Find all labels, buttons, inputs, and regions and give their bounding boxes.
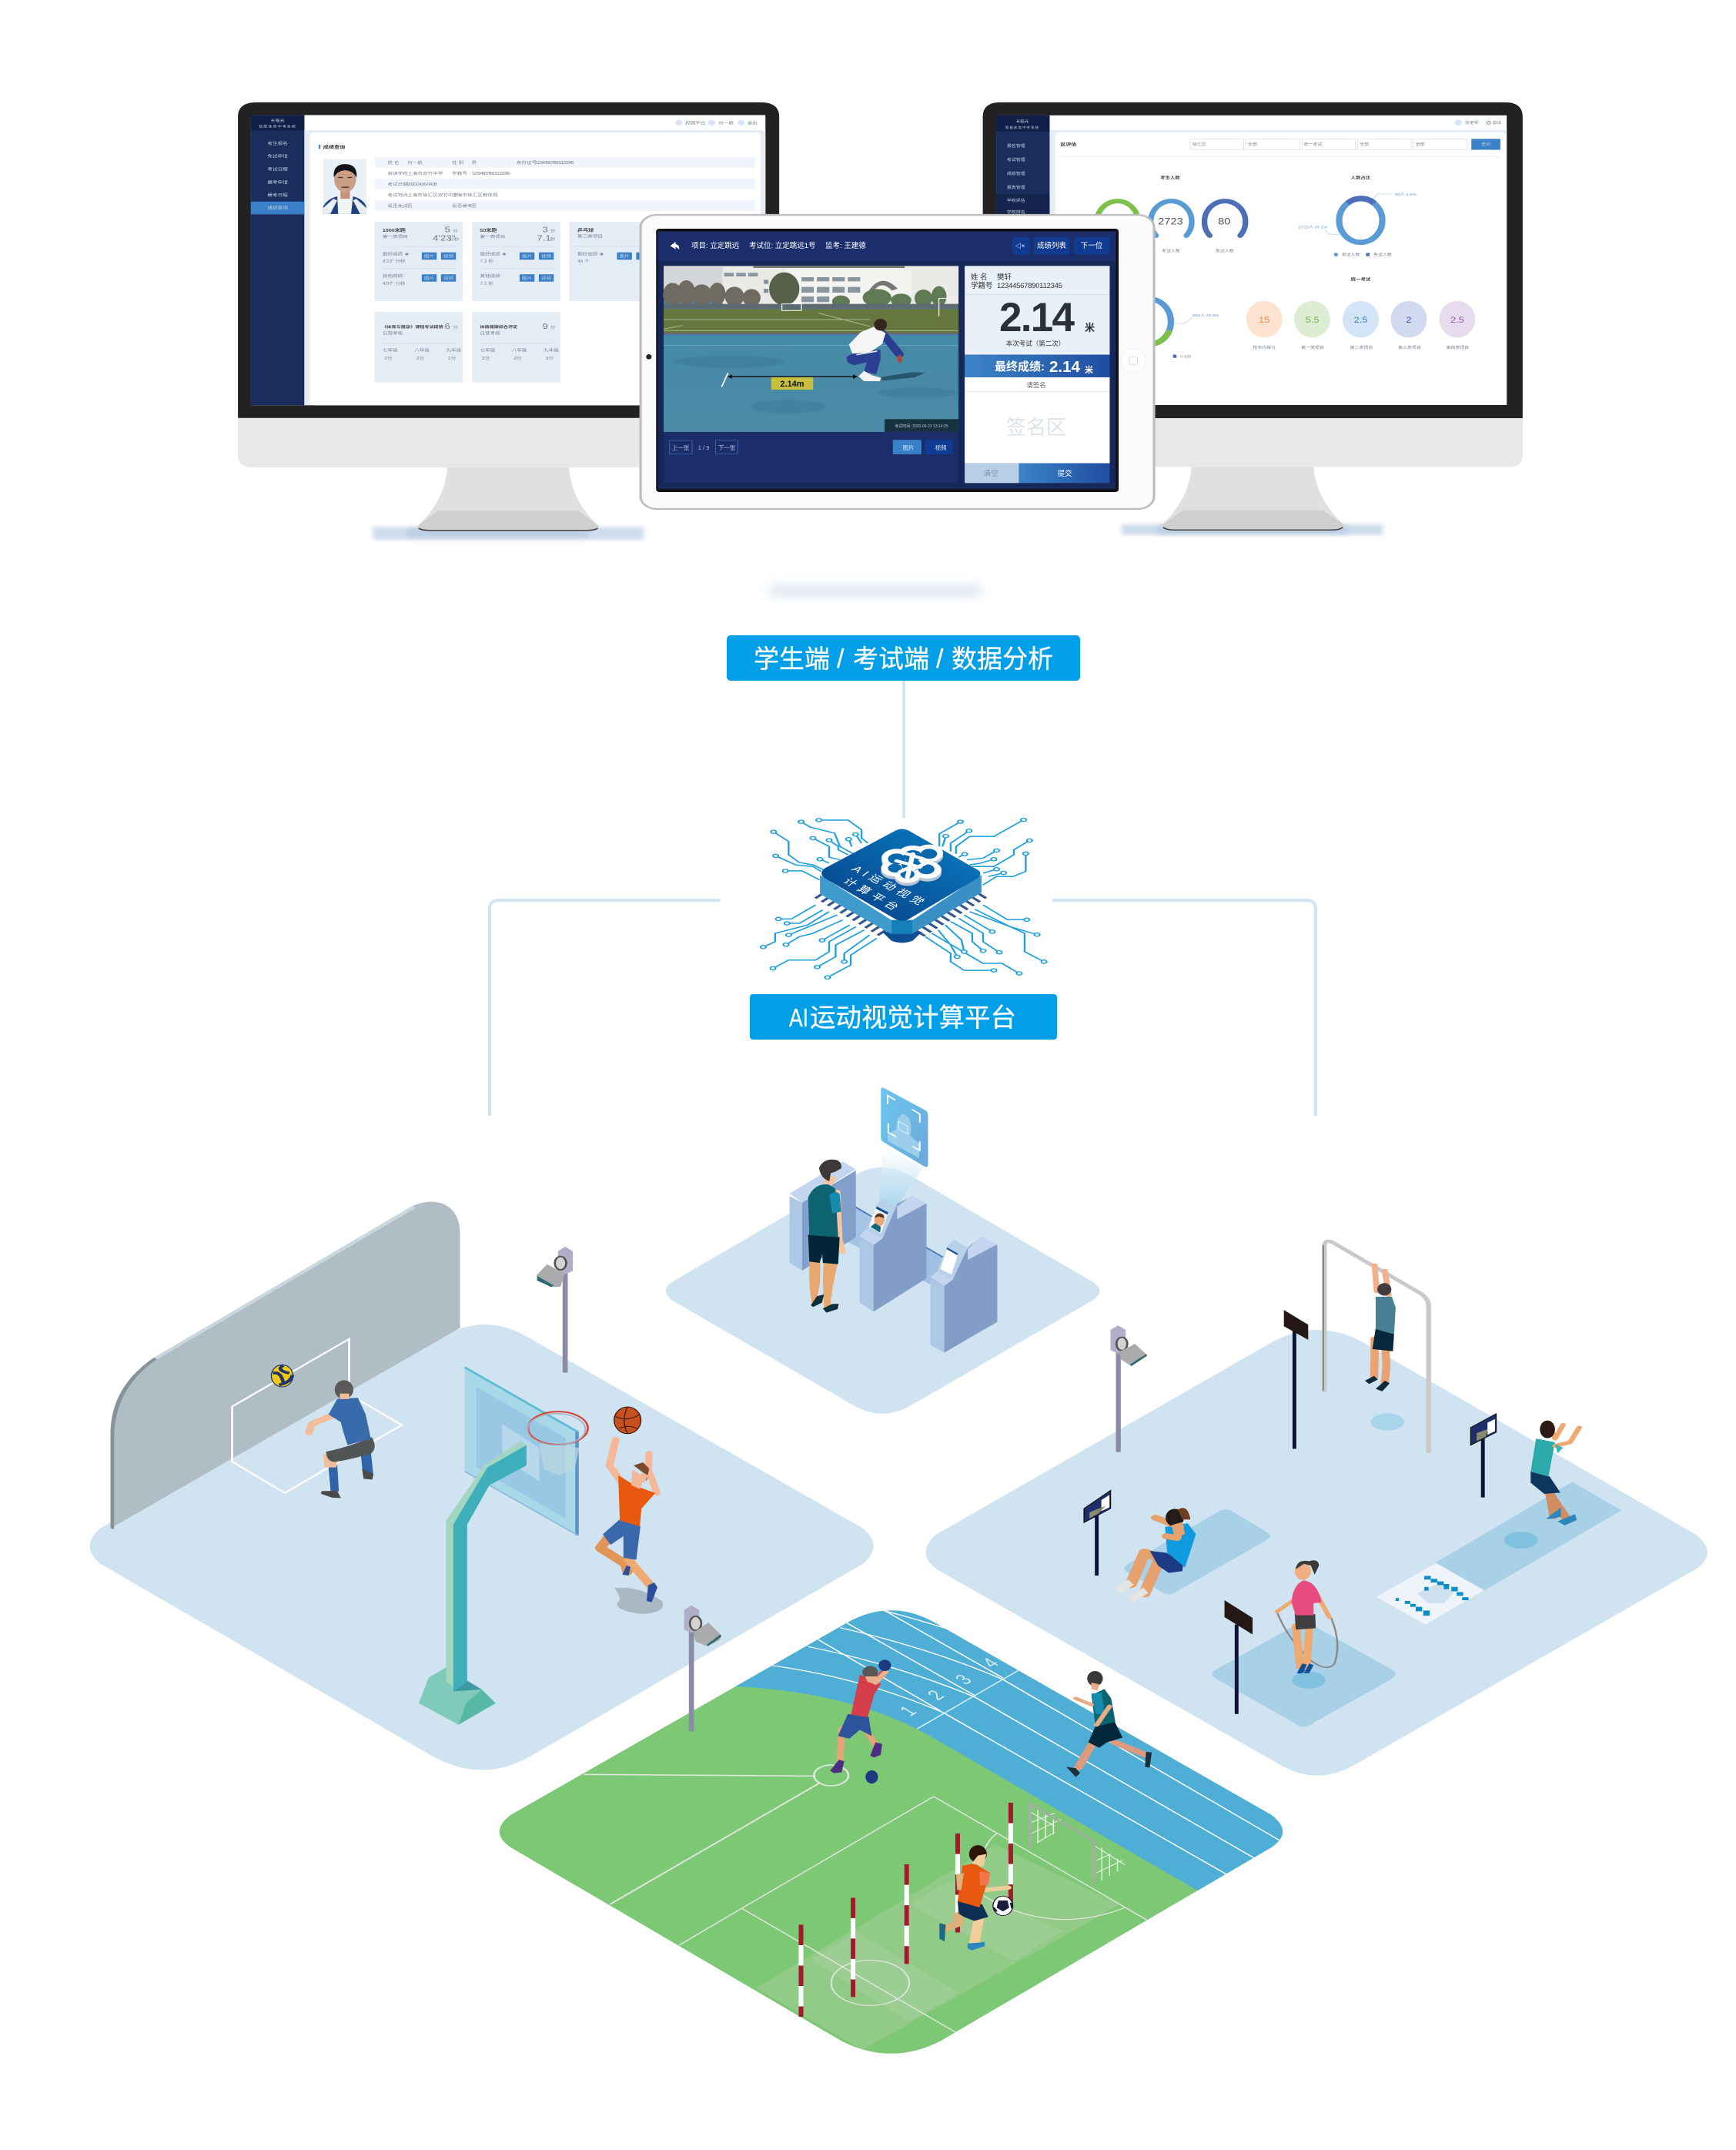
score card: 1000m: 图片 [424,276,434,281]
trace endpoints [761,818,1047,979]
hoop and net [527,1412,588,1475]
score circles: unified exam: 校平均得分 [1253,344,1276,350]
profile table: 否 [472,204,477,209]
photo controls [670,440,952,454]
profile table: 姓 名 [387,160,400,166]
tablet header text: 考试位: 立定跳远1号 [749,241,816,250]
score card: health [472,312,560,383]
final score: 2.14 [1049,358,1080,376]
backboard [465,1368,578,1535]
ID photo [323,159,366,214]
label: AI platform [750,994,1057,1040]
label: clients: / [837,645,845,674]
label: clients [727,635,1080,681]
distance score: 2.14 [999,295,1075,340]
sidebar menu: 成绩管理 [1007,171,1025,176]
donut: score share: 958人 33.9% [1192,313,1219,318]
distance score [999,295,1095,347]
final score: 米 [1085,364,1093,375]
photo labels: 考试时间: 2020-05-23 13:14:25 [895,424,948,429]
sidebar menu: 考生报名 [267,141,288,146]
signature area [983,381,1072,478]
score card: PE course: 2分 [448,356,456,361]
score card: PE course: 6 [444,321,450,331]
sidebar menu: 长临光 [270,118,285,123]
exam photo [663,266,959,432]
gauges: candidate count: 考生人数 [1160,175,1180,180]
student name and ID: 12344567890112345 [997,282,1062,290]
score card: table tennis: 45 个 [577,260,590,264]
score card: PE course: 日常考核 [383,330,403,336]
score card: table tennis: 第三类项目 [577,233,603,239]
shot ball [865,1770,878,1783]
score circles: unified exam: 第一类项目 [1301,344,1324,350]
profile table: 上海市徐汇区教体局 [452,193,498,198]
student name and ID [971,273,1062,290]
donut: share of candidates: 免试人数 [1373,252,1392,257]
lane numbers: 3 [950,1671,976,1687]
score card: 50m: 7.1 秒 [480,281,493,286]
gauges: candidate count: 免试人数 [1216,248,1234,253]
score card: 50m: 视频 [541,253,551,259]
camera pole 3 [1111,1325,1147,1452]
screen: score query: 成绩查询 [323,144,346,150]
profile table [375,157,755,211]
signature area: 请签名 [1026,381,1046,389]
slalom poles [801,1803,1011,2017]
basketball stand [419,1667,496,1725]
profile table: 就读学校 [387,171,408,176]
tablet header text: 项目: 立定跳远 [691,241,740,250]
volleyball [271,1365,293,1387]
turnstile: right [931,1236,997,1353]
lane lines [771,1609,1281,1874]
target lines [232,1339,402,1493]
photo labels: 1 / 3 [698,444,709,451]
chip text: AI运动视觉 [848,864,927,907]
score card: health: 3分 [513,356,522,361]
filter bar: 全部 [1360,142,1370,147]
sidebar menu: 学校排名 [1007,209,1025,215]
profile table: 123445678901123345 [472,172,510,176]
sidebar menu: 学校评估 [1007,197,1025,203]
score card: 1000m: 4'23" [433,233,456,243]
measurement line [721,373,857,390]
wall [111,1201,460,1529]
score card: PE course: 《体育与健身》课程考试成绩 [382,324,443,330]
turnstile: left [790,1161,856,1271]
filter bar: 全部 [1416,142,1425,147]
score card: health: 分 [550,325,555,330]
signature area: 签名区 [1006,416,1066,439]
monitor bezel and chin [983,102,1523,467]
score card: 1000m: 视频 [443,253,453,259]
gauges: candidate count: 2723 [1158,216,1183,226]
score card: table tennis: 最好成绩 ★ [577,252,604,256]
score card: 50m: 图片 [522,253,532,259]
profile table: 刘一航 [407,160,423,166]
student name and ID: 樊轩 [997,273,1012,282]
volleyball player [309,1380,375,1498]
basketball pole [446,1441,527,1691]
footballer [939,1845,1008,1951]
sidebar menu: 报表管理 [1007,185,1025,190]
sidebar menu: 长临光 [1016,119,1029,124]
top bar [675,120,758,126]
score card: 50m: 50米跑 [480,227,497,233]
rope skipping person [1277,1560,1337,1673]
score card: 50m: 分 [550,228,555,233]
score card: 50m: 视频 [541,276,551,281]
score sign: pull-up [1284,1310,1308,1448]
score circles: unified exam: 2.5 [1450,315,1464,325]
sidebar menu: 缓考日程 [267,193,288,198]
donut: share of candidates: 2723人 97.1% [1299,225,1328,230]
top bar: 退出 [748,120,758,126]
score card: 1000m: 最好成绩 ★ [383,252,410,256]
profile table: 性 别 [452,160,463,166]
distance score: 米 [1085,322,1095,333]
profile table: 上海市双竹中学 [407,171,443,176]
signature area: 提交 [1057,469,1072,478]
score card: PE course: 七年级 [383,347,398,353]
icon: brain logo [881,845,943,886]
mat: sit-up [1124,1509,1270,1594]
score card: health: 体质健康综合评定 [480,324,518,330]
profile table: 2020.04.06-04.08 [407,183,438,186]
score card: 1000m: 1000米跑 [383,227,406,233]
sidebar menu: 报名管理 [1007,143,1025,149]
circuit traces [763,820,1044,977]
score card: table tennis [570,222,657,301]
running track [736,1610,1283,1890]
score card: 50m: 7.3 秒 [480,259,493,264]
mat: standing long jump [1435,1482,1621,1590]
score sign: rope [1225,1600,1253,1714]
score card: health: 九年级 [544,347,559,353]
signature area: 清空 [983,469,998,478]
camera pole 2 [684,1606,721,1731]
filter bar: 徐汇区 [1192,142,1206,147]
scene: football field and running track [499,1610,1283,2054]
monitor: student portal [238,102,779,540]
goal [1030,1803,1126,1884]
score card: 50m: 最好成绩 ★ [480,252,507,256]
profile table: 男 [472,161,477,166]
photo labels: 视频 [935,444,947,451]
donut: score share [1129,300,1219,359]
score card: table tennis: 乒乓球 [577,227,594,233]
score card: 1000m [375,222,463,301]
scene: fitness tests [926,1241,1708,1776]
sidebar menu: 缓考申请 [267,179,288,185]
lane numbers: 1 [895,1703,922,1719]
chip body [818,829,983,943]
student name and ID: 姓 名 [971,273,988,282]
header buttons [1012,237,1109,254]
gauges: candidate count [1097,175,1246,253]
lane numbers: 2 [922,1687,949,1703]
score circles: unified exam: 15 [1259,315,1270,325]
screen: regional evaluation [996,116,1507,405]
score card: 50m: 图片 [522,276,532,281]
score screen: sit-up [1084,1491,1111,1576]
photo labels: 上一张 [672,444,690,451]
platform [926,1330,1708,1776]
score card: 50m [472,222,560,301]
score card: health: 七年级 [480,347,495,353]
tablet header text: 成绩列表 [1037,241,1066,250]
sidebar menu: 考试管理 [1007,157,1025,162]
distance score: 本次考试（第二次） [1006,340,1065,347]
basketball [614,1407,641,1434]
score circles: unified exam: 第四类项目 [1446,344,1469,350]
score card: PE course: 九年级 [446,347,461,353]
score circles: unified exam: 2 [1406,315,1412,325]
score card: 1000m: 分秒 [449,237,459,242]
monitor bezel and chin [238,102,779,467]
sidebar menu: 智能体育中考系统 [259,124,296,129]
icon: face scan card [879,1087,928,1207]
photo labels: 2.14m [780,380,804,389]
score circles: unified exam: 2.5 [1354,315,1368,325]
score card: PE course: 八年级 [414,347,430,353]
sidebar menu: 免试申请 [267,153,288,159]
student name and ID: 学籍号 [971,281,993,290]
score card: table tennis: 图片 [619,253,630,259]
profile table: 考试地点 [387,193,408,198]
tablet header text: ◁× [1015,243,1025,249]
filter bar: 查询 [1481,142,1491,147]
filter bar: 统一考试 [1304,142,1323,147]
pixel tile [1376,1563,1483,1625]
profile table: 是否缓考 [452,203,473,209]
score card: PE course: 2分 [384,356,393,361]
score circles: unified exam: 第三类项目 [1398,344,1421,350]
sidebar menu [996,116,1049,405]
floor shadow under tablet [770,585,981,596]
sidebar menu [251,115,304,405]
score circles: unified exam [1246,276,1475,350]
profile table: 否 [407,204,413,209]
top bar [1455,119,1501,126]
pitch markings [584,1765,1149,2032]
scene: wall volleyball and basketball [90,1201,874,1770]
sidebar menu: 考试日程 [267,166,288,172]
turnstile: center [860,1195,927,1311]
score card: 50m: 7.1 [537,233,551,243]
tablet header text: 监考: 王建德 [825,241,866,250]
tablet header text: 下一位 [1081,241,1103,250]
donut: share of candidates: 考试人数 [1342,252,1360,257]
score card: 1000m: 4'07" 分秒 [383,281,406,286]
label: clients: / [936,645,944,674]
score card: 1000m: 图片 [424,253,434,259]
shot put athlete [830,1659,891,1773]
tablet: exam terminal [641,215,1154,509]
connector lines [490,681,1316,1116]
monitor stand [418,467,598,531]
icon: back arrow [671,242,679,249]
donut: share of candidates [1299,175,1417,257]
markers [1292,1414,1537,1689]
score card: 1000m: 5 [444,225,450,234]
score card: 50m: 第一类项目 [480,234,505,239]
score card: 1000m: 分 [453,228,458,233]
score card: PE course: 2分 [416,356,424,361]
result panel [965,266,1109,483]
field ground [499,1610,1283,2054]
score card: 1000m: 4'23" 分秒 [383,259,406,264]
platform [90,1324,874,1770]
gate barriers [838,1197,943,1290]
filter bar: 区评估 [1061,141,1077,147]
chip text: 计算平台 [840,876,902,913]
final score [995,358,1093,376]
score card: 50m: 其他成绩 [480,273,500,279]
scene: entry gate with face recognition [666,1087,1099,1414]
label: clients: 学生端 [754,645,830,673]
label: AI platform: AI [789,1004,808,1033]
tablet body [641,215,1154,509]
donut: share of candidates: 80人 2.9% [1395,193,1417,197]
tablet header text [691,241,1103,250]
score card: health: 3分 [546,356,554,361]
score card: health: 日常考核 [480,330,500,336]
monitor: data analysis [983,102,1523,535]
sidebar menu: 成绩查询 [267,205,288,210]
filter bar [1061,139,1500,157]
monitor stand [1162,467,1343,530]
donut: score share: 0-9分 [1180,353,1192,359]
profile table: 考试日期 [387,182,408,186]
label: clients: 数据分析 [952,645,1053,673]
score card: PE course: 分 [453,325,458,330]
profile table: 上海市徐汇区双竹中学 [407,193,458,198]
screen: score query [251,115,765,405]
score card: health: 3分 [482,356,490,361]
pull-up bar [1323,1241,1429,1452]
lighter pitch bands [756,1844,1120,2050]
label: AI platform: 运动视觉计算平台 [810,1004,1016,1033]
basketball player [600,1440,663,1614]
score card: health: 八年级 [512,347,527,353]
person at gate [808,1160,842,1313]
profile table: 学籍号 [452,171,467,176]
long jump person [1530,1421,1579,1524]
chip: AI platform [761,818,1047,979]
mat: rope skipping [1212,1622,1396,1726]
lane numbers [895,1655,1004,1719]
profile table: 身份证号 [517,160,537,166]
gauges: candidate count: 80 [1218,216,1230,226]
label: clients: 考试端 [853,645,929,673]
sidebar menu: 智能体育中考系统 [1005,125,1039,130]
photo labels [672,380,948,451]
score card: health: 9 [542,321,548,331]
profile table: 是否免试 [387,203,408,209]
score card: 50m: 3 [542,225,548,234]
photo labels: 下一张 [718,444,736,451]
donut: share of candidates: 人数占比 [1351,175,1370,180]
top bar: 退出 [1492,120,1501,126]
final score: 最终成绩: [995,360,1045,373]
score circles: unified exam: 第二类项目 [1350,344,1373,350]
filter bar: 全部 [1248,142,1258,147]
top bar: 刘一航 [718,120,734,126]
top bar: 张老师 [1465,120,1479,126]
score screen: long jump [1470,1414,1496,1498]
sit-up person [1115,1508,1196,1602]
soccer ball [993,1896,1013,1916]
score card: PE course [375,312,463,383]
score card: 50m: 秒 [550,237,555,242]
runner [1066,1671,1152,1777]
score circles: unified exam: 统一考试 [1351,276,1370,282]
camera pole 1 [537,1247,573,1373]
person on pull-up bar [1365,1265,1396,1391]
score card: 1000m: 视频 [443,276,453,281]
photo labels: 图片 [902,444,915,451]
lane numbers: 4 [977,1655,1004,1671]
platform [666,1167,1099,1414]
gauges: candidate count: 考试人数 [1162,248,1180,253]
profile table: 123445678901123345 [536,162,575,166]
score card: 1000m: 其他成绩 [383,273,403,279]
score card: 1000m: 第一类项目 [383,234,408,239]
top bar: 校园平台 [685,120,706,126]
score circles: unified exam: 5.5 [1306,315,1320,325]
athlete crouching [847,319,925,381]
